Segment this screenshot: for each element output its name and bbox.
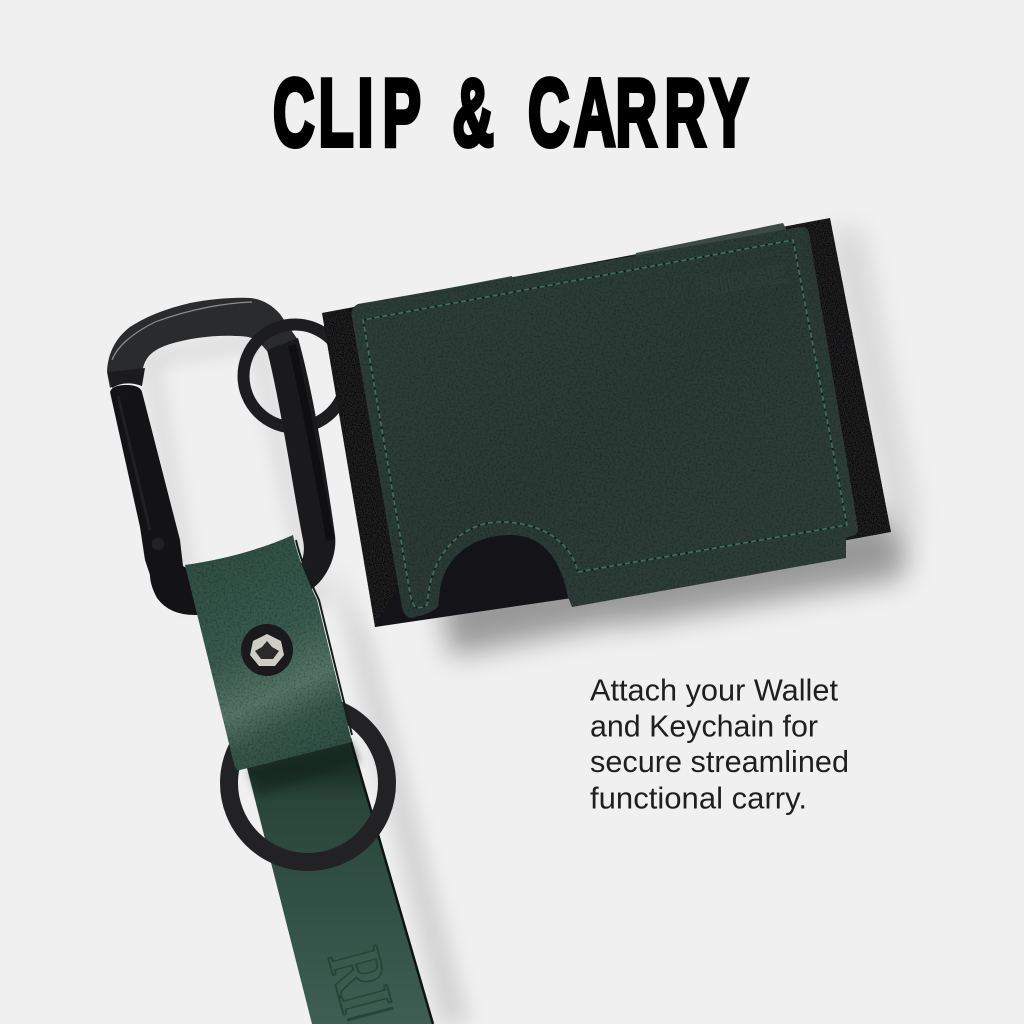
embossed letter fragment [347,1008,393,1020]
carabiner gate and lower hook [110,385,198,615]
title: CLIP & CARRY [273,58,748,166]
large key ring [229,704,387,862]
wallet [322,218,891,627]
embossed strap text: RI [311,940,408,1021]
elastic band [322,218,891,627]
carabiner [107,298,346,615]
notch interior [375,530,575,627]
body text: functional carry. [590,780,807,816]
gate pin [152,538,164,550]
soft shadows [150,230,918,1024]
small split ring [244,324,346,428]
keychain strap [185,535,433,1024]
carabiner top bar [107,298,298,388]
stitching [363,240,847,608]
body text: and Keychain for [590,708,818,744]
wallet embossed logo: RIDGE [698,260,788,302]
rivet icon [241,624,293,676]
body text: secure streamlined [590,744,849,779]
body text: Attach your Wallet [590,672,838,708]
upper leather loop [185,535,352,770]
back leather strips [365,223,790,316]
carabiner spine [267,338,335,592]
front leather panel [352,227,858,618]
shadow under fold [248,742,360,795]
body text [590,672,849,816]
lower strap [247,738,433,1024]
